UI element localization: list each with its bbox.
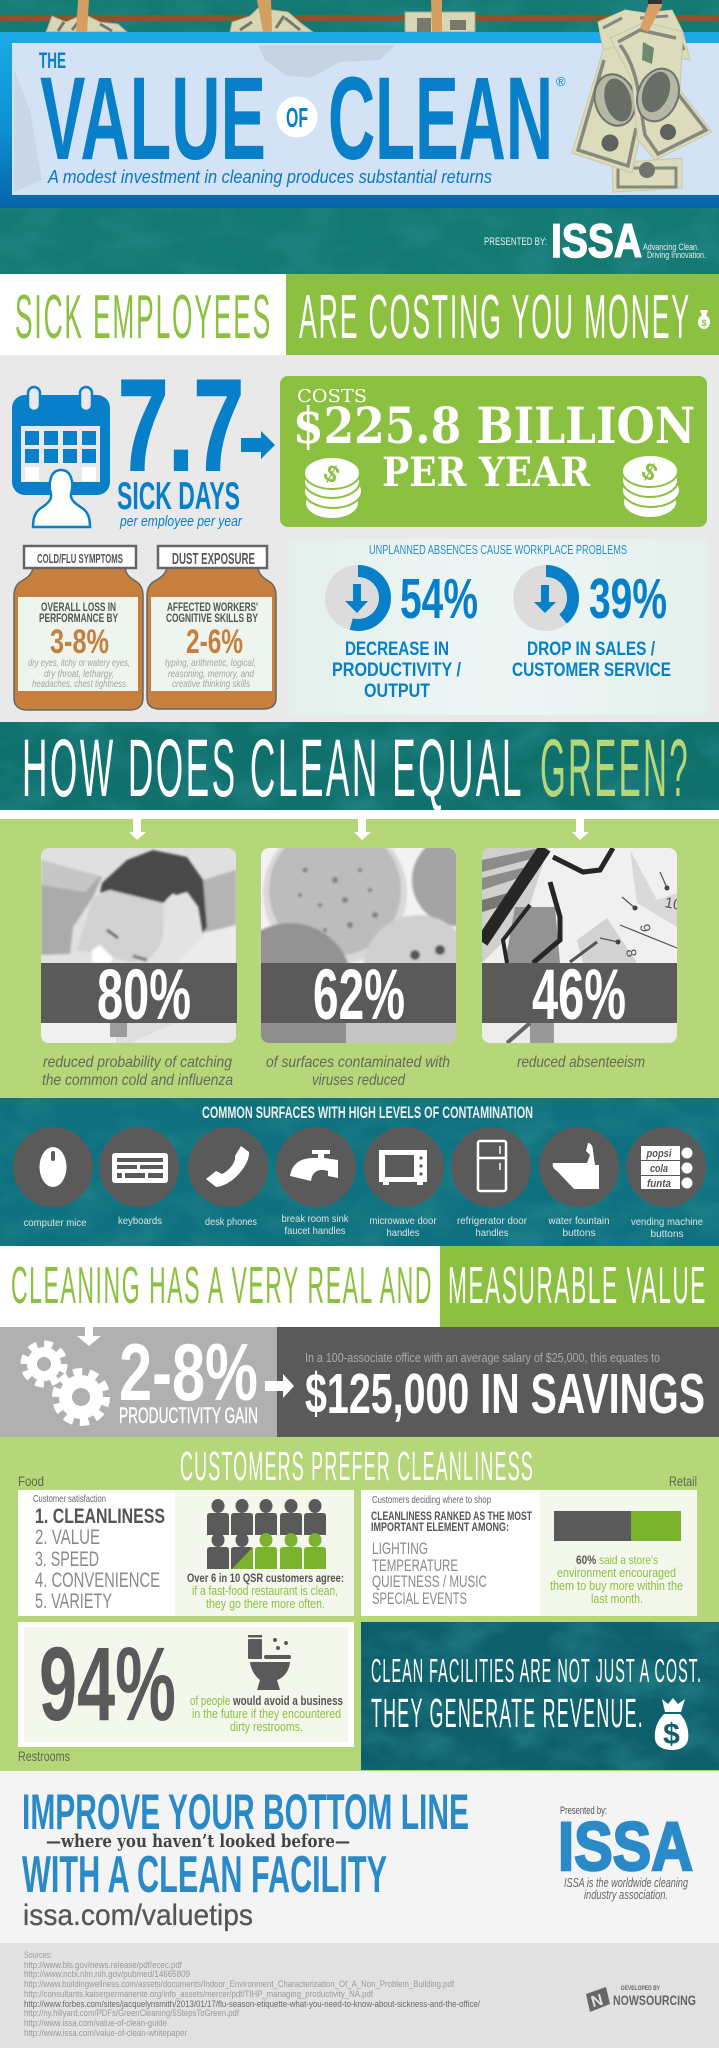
panel: retail: Customers deciding where to shop xyxy=(372,1495,491,1506)
panel: annual cost: COSTS xyxy=(297,386,367,407)
icon: computer mouse xyxy=(40,1147,66,1187)
icon: faucet xyxy=(290,1150,338,1181)
arrows down xyxy=(129,819,589,840)
icon: money bag small xyxy=(698,310,710,329)
bottle: dust exposure: 2-6% xyxy=(186,623,243,661)
card: 46% photo of glasses, clock and money: 46% xyxy=(532,956,626,1035)
bottle: cold and flu symptoms: COLD/FLU SYMPTOMS xyxy=(37,551,123,566)
section labels xyxy=(18,1473,697,1764)
panel: food: Over 6 in 10 QSR customers agree: xyxy=(187,1571,344,1585)
icon: vending machine buttons: cola xyxy=(650,1163,668,1175)
panel: food: 5. VARIETY xyxy=(35,1590,112,1613)
icon: keyboard xyxy=(112,1153,168,1183)
panel: food: 3. SPEED xyxy=(35,1548,99,1571)
stat: 7.7 sick days: 7.7 xyxy=(118,352,244,498)
panel: retail: TEMPERATURE xyxy=(372,1557,458,1575)
card: 62% photo of petri dishes: 62% xyxy=(313,956,405,1035)
sources: Sources: xyxy=(24,1950,52,1961)
presented by ISSA: PRESENTED BY: xyxy=(484,236,547,248)
icon: calendar with person xyxy=(12,387,110,527)
panel: call to action: WITH A CLEAN FACILITY xyxy=(22,1846,387,1904)
panel: productivity gain xyxy=(0,1327,277,1437)
bottle: cold and flu symptoms: headaches, chest tightness xyxy=(32,678,127,690)
panel: productivity gain: 2-8% xyxy=(119,1328,258,1418)
sources: http://www.ncbi.nlm.nih.gov/pubmed/14665809 xyxy=(24,1969,190,1980)
subtitle: A modest investment in cleaning produces substantial returns xyxy=(47,166,492,187)
panel: customers prefer cleanliness background xyxy=(0,1437,719,1771)
panel: food: if a fast-food restaurant is clean, xyxy=(192,1583,338,1598)
icon: gears xyxy=(24,1344,106,1422)
clothesline rope xyxy=(0,15,719,21)
panel: annual cost: PER YEAR xyxy=(382,449,591,496)
surface labels xyxy=(24,1213,703,1240)
card: 46% photo of glasses, clock and money xyxy=(482,848,683,1043)
panel: call to action: —where you haven’t looked before— xyxy=(46,1831,350,1852)
panel: common surfaces: COMMON SURFACES WITH HIGH LEVELS OF CONTAMINATION xyxy=(202,1103,533,1122)
chart: people pictogram xyxy=(207,1499,326,1569)
chart: 54% donut xyxy=(325,565,391,631)
sources: http://ny.hillyard.com/PDFs/GreenCleaning/5StepsToGreen.pdf xyxy=(24,2008,239,2019)
bottle: dust exposure: creative thinking skills xyxy=(172,678,251,690)
sources xyxy=(0,1943,719,2048)
panel: food: they go there more often. xyxy=(206,1596,325,1611)
presented by ISSA xyxy=(484,214,706,267)
presented by ISSA: Advancing Clean. xyxy=(643,242,699,253)
panel: retail: 60% said a store's xyxy=(576,1553,658,1567)
panel: retail: environment encouraged xyxy=(557,1565,676,1580)
icon: desk phone xyxy=(206,1146,249,1187)
panel: retail: SPECIAL EVENTS xyxy=(372,1590,467,1608)
label: sales xyxy=(512,638,671,681)
section labels: Restrooms xyxy=(18,1748,70,1764)
surface labels: break room sink xyxy=(282,1213,349,1225)
panel: retail: LIGHTING xyxy=(372,1540,428,1558)
label: productivity xyxy=(332,638,461,702)
captions for cards: viruses reduced xyxy=(312,1072,406,1089)
panel: retail: last month. xyxy=(591,1591,643,1606)
OF badge: OF xyxy=(286,102,308,133)
presented by ISSA: ISSA xyxy=(551,214,642,267)
presented by ISSA logo: industry association. xyxy=(584,1887,668,1902)
icon: coins right: $ xyxy=(637,457,662,488)
label: sales: CUSTOMER SERVICE xyxy=(512,659,671,681)
surface labels: computer mice xyxy=(24,1217,87,1229)
panel: food: 4. CONVENIENCE xyxy=(35,1569,160,1592)
icon: vending machine buttons xyxy=(641,1146,692,1190)
sources: http://consultants.kaiserpermanente.org/info_assets/mercer/pdf/TIHP_managing_productivity_NA.pdf xyxy=(24,1989,373,2000)
panel: annual cost xyxy=(280,376,707,527)
icon: money bag xyxy=(655,1698,688,1751)
stat: 7.7 sick days xyxy=(117,352,244,530)
panel: retail: CLEANLINESS RANKED AS THE MOST xyxy=(371,1511,532,1523)
card: 46% photo of glasses, clock and money: 10 xyxy=(663,894,683,914)
icon: coins left: $ xyxy=(319,459,344,490)
captions for cards: the common cold and influenza xyxy=(42,1072,233,1089)
icon: refrigerator xyxy=(478,1141,506,1191)
surface labels: refrigerator door xyxy=(457,1215,527,1227)
section labels: Food xyxy=(18,1473,44,1489)
stat: 7.7 sick days: SICK DAYS xyxy=(117,475,240,518)
heading: The Value of Clean: VALUE xyxy=(40,53,266,185)
icon: vending machine buttons: popsi xyxy=(646,1148,672,1160)
label: productivity: DECREASE IN xyxy=(345,638,449,660)
icon: microwave xyxy=(379,1150,427,1185)
bottle: dust exposure xyxy=(147,546,276,709)
panel: restrooms: of people would avoid a business xyxy=(190,1693,343,1708)
card: 80% photo of sick woman xyxy=(41,848,237,1043)
chart: 60% bar xyxy=(554,1511,681,1541)
bottle: dust exposure: reasoning, memory, and xyxy=(168,668,255,680)
panel: restrooms xyxy=(18,1622,354,1747)
surface labels: buttons xyxy=(650,1228,684,1240)
white divider and green panel xyxy=(0,810,719,819)
surface labels: desk phones xyxy=(205,1216,257,1228)
surface labels: handles xyxy=(386,1227,420,1239)
panel: workplace problems xyxy=(289,539,707,715)
bottle: cold and flu symptoms xyxy=(14,546,143,710)
bottle: cold and flu symptoms: dry eyes, itchy or watery eyes, xyxy=(28,657,130,669)
panel: productivity gain: PRODUCTIVITY GAIN xyxy=(119,1403,258,1428)
stat: 7.7 sick days: per employee per year xyxy=(119,513,243,530)
sources: http://www.bls.gov/news.release/pdf/ecec.pdf xyxy=(24,1960,182,1971)
stat: 54%: 54% xyxy=(400,567,478,631)
panel: restrooms: dirty restrooms. xyxy=(230,1719,303,1734)
presented by ISSA logo: Presented by: xyxy=(560,1805,607,1817)
title banner xyxy=(0,32,719,208)
surface labels: handles xyxy=(476,1227,508,1239)
section labels: Retail xyxy=(669,1473,697,1489)
captions for cards xyxy=(42,1054,645,1089)
bottle: cold and flu symptoms: dry throat, lethargy, xyxy=(44,668,114,680)
sources: http://www.forbes.com/sites/jacquelynsmith/2013/01/17/flu-season-etiquette-what-you-need-to-know-about-sickness-and-the-office/ xyxy=(24,1999,480,2010)
panel: common surfaces xyxy=(0,1098,719,1246)
surface labels: vending machine xyxy=(631,1216,703,1228)
surface labels: faucet handles xyxy=(284,1225,346,1237)
surface labels: buttons xyxy=(562,1227,596,1239)
panel: call to action: issa.com/valuetips xyxy=(23,1899,253,1932)
heading: The Value of Clean: ® xyxy=(556,74,566,89)
card: 46% photo of glasses, clock and money: 9 xyxy=(637,923,654,933)
panel: food: Customer satisfaction xyxy=(33,1494,106,1505)
sources: http://www.buildingwellness.com/assets/documents/Indoor_Environment_Characterization_Of_A_Non_Problem_Building.pdf xyxy=(24,1979,454,1990)
panel: retail: IMPORTANT ELEMENT AMONG: xyxy=(371,1522,509,1534)
panel: food: 1. CLEANLINESS xyxy=(35,1505,165,1528)
logo: NowSourcing: N xyxy=(589,1992,605,2011)
panel: food: 2. VALUE xyxy=(35,1526,100,1549)
panel: clean facilities callout xyxy=(361,1622,719,1770)
stat: 39%: 39% xyxy=(589,567,667,631)
heading: The Value of Clean: THE xyxy=(39,48,66,73)
hanging money and clothespins xyxy=(46,0,475,32)
panel: call to action xyxy=(0,1771,719,1943)
icon: money bag: $ xyxy=(663,1718,680,1751)
money cluster illustration xyxy=(572,0,712,192)
panel: retail: QUIETNESS / MUSIC xyxy=(372,1573,487,1591)
label: productivity: PRODUCTIVITY / xyxy=(332,659,461,681)
arrow to cost panel xyxy=(241,431,275,459)
label: productivity: OUTPUT xyxy=(364,680,430,702)
icon: toilet xyxy=(248,1635,291,1690)
sick days section background xyxy=(0,355,719,722)
captions for cards: reduced absenteeism xyxy=(517,1054,645,1071)
logo: NowSourcing: DEVELOPED BY xyxy=(621,1986,660,1992)
icon: coins left xyxy=(304,457,362,519)
bottle: dust exposure: DUST EXPOSURE xyxy=(172,551,255,568)
panel: food xyxy=(18,1490,354,1616)
panel: restrooms: in the future if they encountered xyxy=(192,1706,341,1721)
panel: retail xyxy=(361,1490,697,1616)
bottle: cold and flu symptoms: PERFORMANCE BY xyxy=(39,613,118,625)
OF badge xyxy=(276,96,318,138)
bottle: cold and flu symptoms: 3-8% xyxy=(50,623,109,661)
label: sales: DROP IN SALES / xyxy=(527,638,655,660)
card: 62% photo of petri dishes xyxy=(261,848,456,1043)
section banner: sick employees: SICK EMPLOYEES xyxy=(15,283,272,352)
background: teal header xyxy=(0,0,719,274)
bottle: dust exposure: typing, arithmetic, logical, xyxy=(165,657,256,669)
arrow to savings xyxy=(265,1374,294,1398)
panel: restrooms: 94% xyxy=(39,1626,176,1743)
surface labels: microwave door xyxy=(370,1215,437,1227)
sources: http://www.issa.com/value-of-clean-whitepaper xyxy=(24,2028,187,2039)
icon: water fountain xyxy=(553,1143,599,1189)
panel: retail: them to buy more within the xyxy=(550,1578,683,1593)
icon: vending machine buttons: funta xyxy=(647,1178,671,1190)
presented by ISSA logo xyxy=(558,1805,693,1902)
card: 46% photo of glasses, clock and money: 8 xyxy=(623,948,640,958)
bottle: cold and flu symptoms: OVERALL LOSS IN xyxy=(41,602,116,614)
chart: 39% donut xyxy=(513,565,579,631)
sources: http://www.issa.com/value-of-clean-guide xyxy=(24,2018,167,2029)
captions for cards: of surfaces contaminated with xyxy=(266,1054,450,1071)
bottle: dust exposure: COGNITIVE SKILLS BY xyxy=(166,613,258,625)
card: 80% photo of sick woman: 80% xyxy=(97,956,191,1035)
surface labels: keyboards xyxy=(118,1215,162,1227)
icon: coins right xyxy=(622,455,680,518)
logo: NowSourcing xyxy=(586,1986,696,2012)
icon: money bag small: $ xyxy=(701,318,707,328)
surface labels: water fountain xyxy=(548,1215,610,1227)
panel: savings xyxy=(277,1327,719,1437)
captions for cards: reduced probability of catching xyxy=(43,1054,232,1071)
bottle: dust exposure: AFFECTED WORKERS' xyxy=(167,602,258,614)
presented by ISSA logo: ISSA xyxy=(558,1808,693,1885)
